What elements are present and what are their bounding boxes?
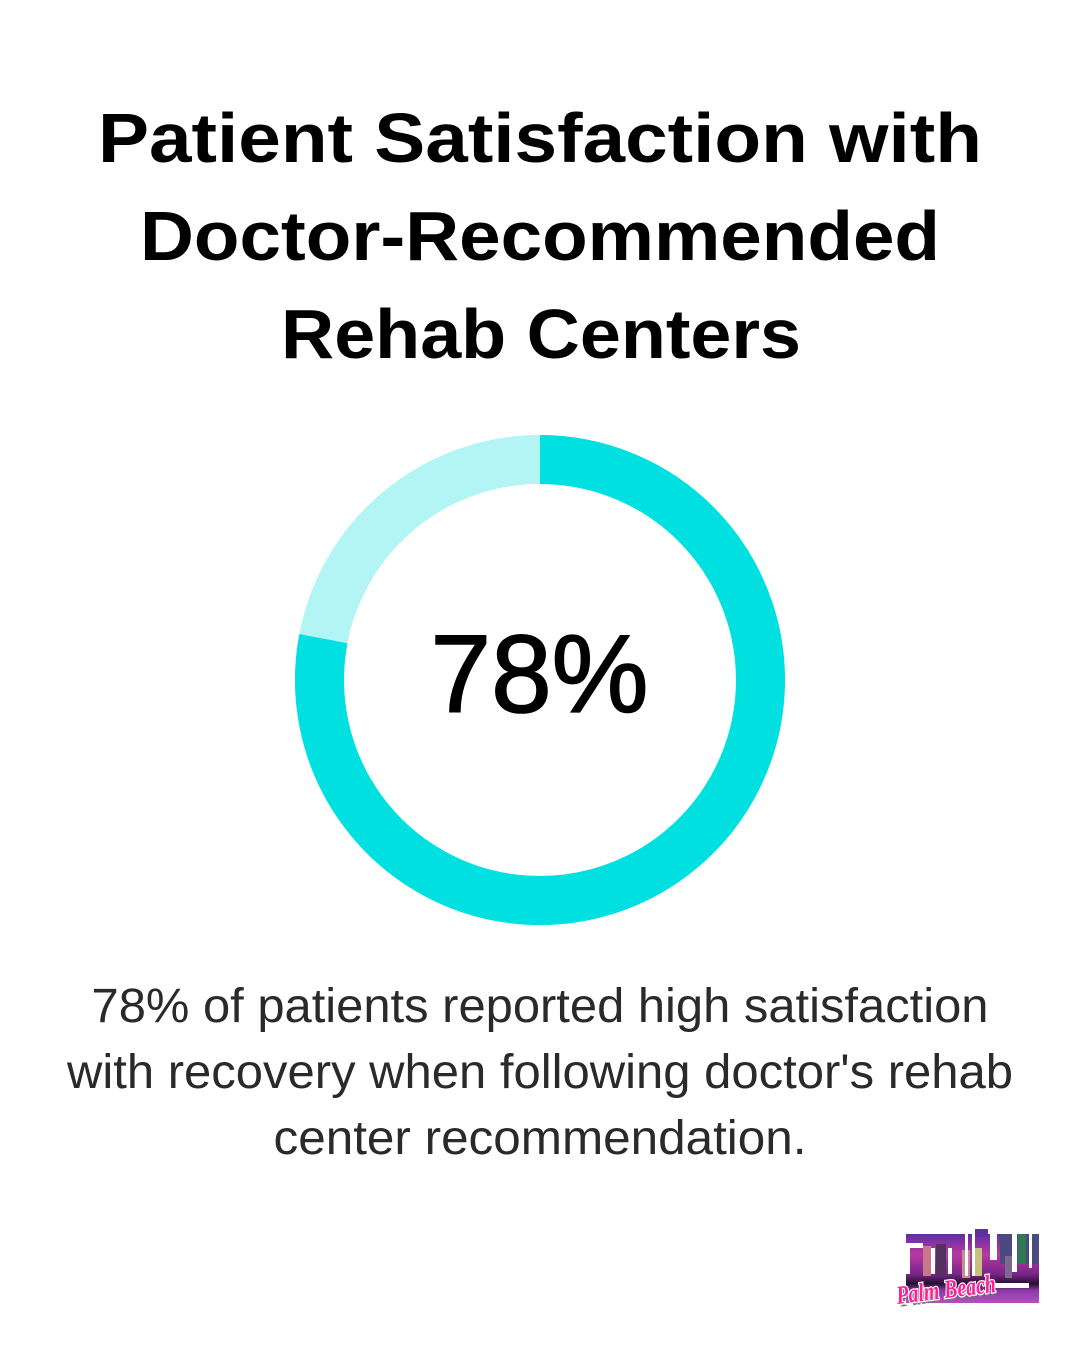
description text: with recovery when following doctor's rehab (66, 1046, 1013, 1099)
description text: 78% of patients reported high satisfaction (92, 980, 988, 1033)
title: Doctor-Recommended (140, 197, 940, 275)
logo: Amity Palm Beach (894, 1228, 1039, 1313)
logo script: Palm Beach: Palm Beach (894, 1269, 997, 1310)
title (98, 99, 982, 373)
logo script: Palm Beach: Palm Beach (897, 1272, 997, 1313)
title: Patient Satisfaction with (98, 99, 982, 177)
donut value: 78% (430, 613, 648, 736)
title: Rehab Centers (281, 295, 801, 373)
description text (66, 980, 1013, 1165)
description text: center recommendation. (274, 1112, 806, 1165)
donut chart: 78% (319, 460, 760, 901)
